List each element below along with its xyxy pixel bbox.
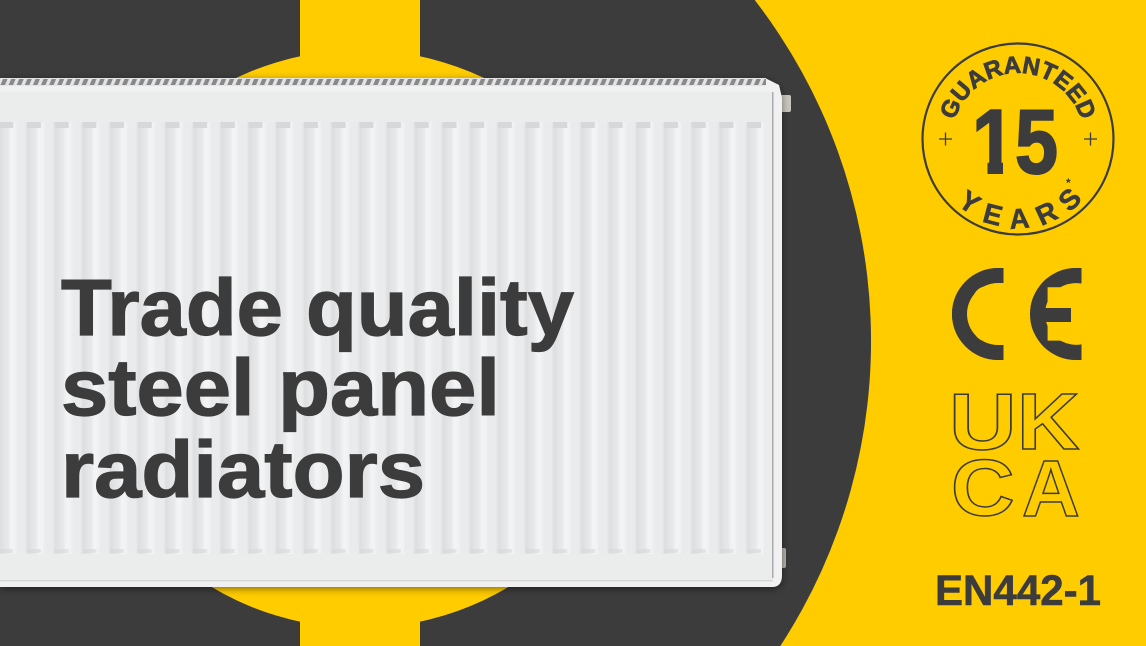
standard label EN442-1: EN442-1 [935,567,1101,615]
CE letter E: E [1024,238,1088,389]
radiator: valve bottom [777,548,786,568]
UKCA letter C: C [951,443,1015,532]
background: yellow vertical band [300,0,420,646]
background: yellow circle behind radiator [71,50,649,628]
headline [61,263,575,514]
UKCA mark [949,377,1080,533]
radiator: rib top shading [0,122,764,128]
UKCA letter K: K [1017,377,1079,466]
UKCA letter A: A [1022,444,1080,533]
radiator: bottom edge line [0,580,773,582]
CE mark [952,268,1082,360]
badge: years arc text: YEARS [962,188,1080,230]
UKCA letter U: U [949,377,1017,466]
radiator [0,78,791,587]
radiator: top grille [0,78,766,86]
radiator: body [0,78,782,587]
radiator: side edge line [772,92,774,578]
CE letter C [952,268,1004,360]
badge: plus right [1084,132,1097,146]
badge ring [922,44,1114,234]
headline line 3: radiators [61,425,425,514]
badge: asterisk: * [1066,176,1071,190]
headline line 2: steel panel [61,343,500,432]
radiator: vertical ribs [0,122,764,554]
CE letter E [1030,268,1082,360]
radiator: rib bottom shading [0,549,764,553]
radiator: valve top [779,95,791,112]
badge: guaranteed arc text: GUARANTEED [941,56,1094,118]
CE letter C: C [947,239,1024,389]
badge: plus left [939,132,952,146]
badge: guaranteed 15 years [921,42,1115,236]
badge: number 15: 15 [972,92,1058,193]
radiator: front face [0,92,773,581]
background: large dark circle [0,0,871,646]
headline line 1: Trade quality [61,263,575,352]
